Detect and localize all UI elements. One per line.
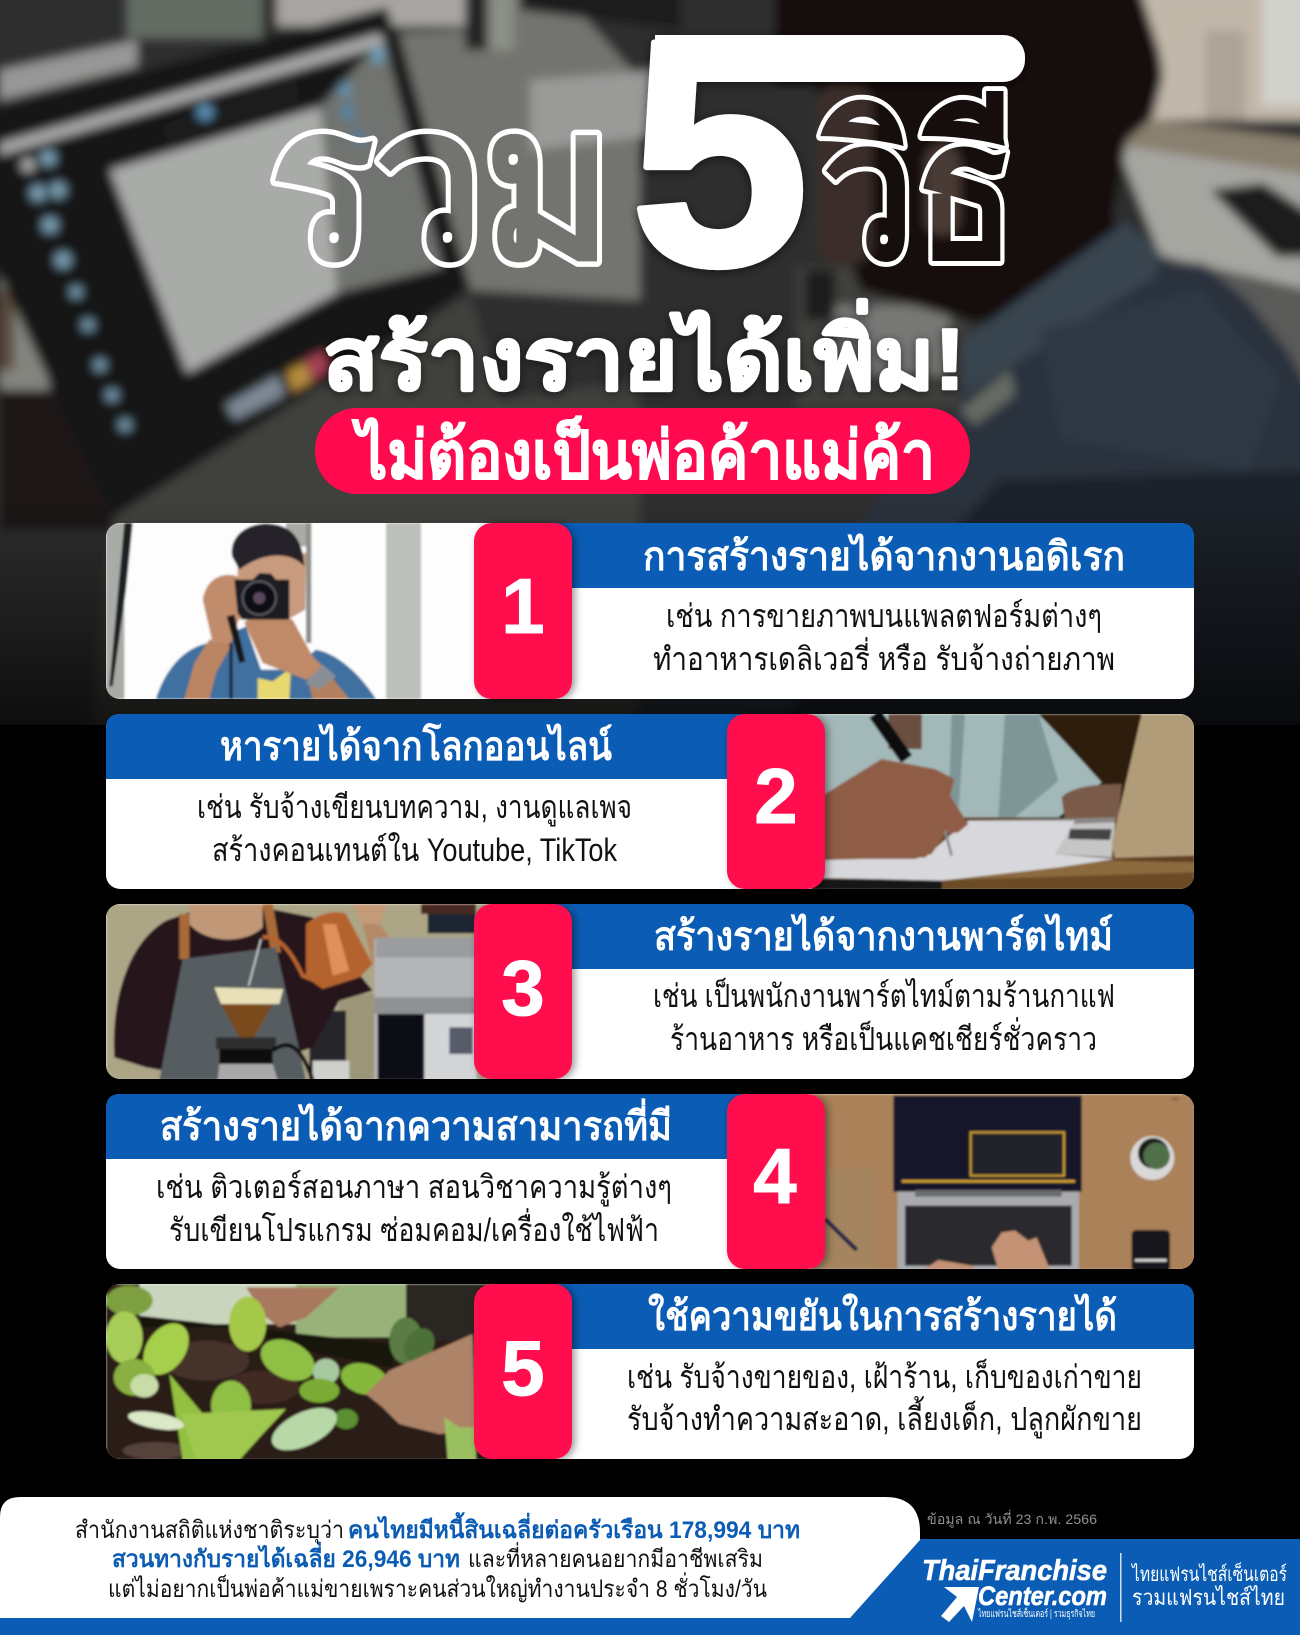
pink pill banner: ไม่ต้องเป็นพ่อค้าแม่ค้า xyxy=(352,415,935,492)
photo: barista pouring coffee xyxy=(106,904,506,1080)
description: สร้างคอนเทนต์ใน Youtube, TikTok xyxy=(212,832,618,868)
heading: สร้างรายได้จากความสามารถที่มี xyxy=(160,1098,672,1149)
footer statistics panel: แต่ไม่อยากเป็นพ่อค้าแม่ขายเพราะคนส่วนใหญ่ทำงานประจำ 8 ชั่วโมง/วัน xyxy=(108,1572,767,1603)
description: รับเขียนโปรแกรม ซ่อมคอม/เครื่องใช้ไฟฟ้า xyxy=(169,1208,659,1248)
heading: หารายได้จากโลกออนไลน์ xyxy=(220,723,612,769)
photo: writing by hand xyxy=(800,714,1195,890)
description: ร้านอาหาร หรือเป็นแคชเชียร์ชั่วคราว xyxy=(670,1017,1097,1057)
footer statistics panel: และที่หลายคนอยากมีอาชีพเสริม xyxy=(468,1542,763,1573)
subtitle: สร้างรายได้เพิ่ม! xyxy=(323,298,965,408)
description: เช่น เป็นพนักงานพาร์ตไทม์ตามร้านกาแฟ xyxy=(653,977,1115,1014)
number badge 4: 4 xyxy=(753,1132,797,1220)
description xyxy=(156,1169,672,1248)
title word: รวม: รวม xyxy=(269,63,613,304)
shirt xyxy=(860,260,1300,523)
description xyxy=(653,598,1115,677)
logo: ThaiFranchise Center: ThaiFranchise xyxy=(922,1555,1107,1587)
footer statistics panel: สำนักงานสถิติแห่งชาติระบุว่า xyxy=(75,1517,344,1545)
header bar xyxy=(540,904,1194,969)
description: เช่น รับจ้างขายของ, เฝ้าร้าน, เก็บของเก่าขาย xyxy=(627,1358,1142,1395)
header bar xyxy=(540,1284,1194,1349)
main title: รวม 5 วิธี xyxy=(270,35,1025,274)
monitor xyxy=(0,7,470,517)
description xyxy=(197,789,632,868)
heading: สร้างรายได้จากงานพาร์ตไทม์ xyxy=(654,913,1113,959)
number badge 2 xyxy=(727,714,825,889)
description: ทำอาหารเดลิเวอรี่ หรือ รับจ้างถ่ายภาพ xyxy=(653,637,1115,677)
right background xyxy=(1140,0,1300,120)
description: รับจ้างทำความสะอาด, เลี้ยงเด็ก, ปลูกผักขาย xyxy=(627,1396,1142,1439)
logo: ThaiFranchise Center: Center.com xyxy=(978,1581,1107,1611)
photo: laptop on wooden desk xyxy=(800,1094,1195,1272)
header bar xyxy=(106,1094,760,1159)
heading: การสร้างรายได้จากงานอดิเรก xyxy=(643,533,1125,579)
panel: item 1 xyxy=(106,523,1194,699)
panel: item 4 xyxy=(106,1094,1195,1272)
description: เช่น การขายภาพบนแพลตฟอร์มต่างๆ xyxy=(666,598,1102,634)
head xyxy=(775,0,1163,325)
description xyxy=(653,977,1115,1057)
hero photo: person working at a monitor xyxy=(0,0,1300,745)
header bar xyxy=(540,523,1194,588)
icon: logo arrow xyxy=(941,1587,979,1622)
heading: ใช้ความขยันในการสร้างรายได้ xyxy=(648,1293,1117,1339)
description: เช่น ติวเตอร์สอนภาษา สอนวิชาความรู้ต่างๆ xyxy=(156,1169,672,1207)
clutter under chin xyxy=(797,267,967,407)
photo: photographer xyxy=(106,523,422,699)
footer statistics panel: สวนทางกับรายได้เฉลี่ย 26,946 บาท xyxy=(112,1541,460,1573)
number badge 5 xyxy=(474,1284,572,1459)
number badge 4 xyxy=(727,1094,825,1269)
footer blue band xyxy=(0,1539,1300,1635)
footer statistics panel: คนไทยมีหนี้สินเฉลี่ยต่อครัวเรือน 178,994 บาท xyxy=(348,1511,800,1544)
number badge 2: 2 xyxy=(754,752,798,840)
logo tagline xyxy=(1130,1561,1287,1610)
number badge 1 xyxy=(474,523,572,699)
footer statistics panel xyxy=(0,1497,920,1618)
panel: item 5 xyxy=(106,1284,1194,1460)
panel: item 3 xyxy=(106,904,1194,1080)
title numeral 5 xyxy=(630,0,1025,333)
description: เช่น รับจ้างเขียนบทความ, งานดูแลเพจ xyxy=(197,789,632,827)
data date note: ข้อมูล ณ วันที่ 23 ก.พ. 2566 xyxy=(927,1510,1097,1528)
number badge 3: 3 xyxy=(501,944,545,1032)
panel: item 2 xyxy=(106,714,1195,890)
number badge 3 xyxy=(474,904,572,1079)
description xyxy=(627,1358,1142,1439)
header bar xyxy=(106,714,760,779)
logo tagline: รวมแฟรนไชส์ไทย xyxy=(1132,1585,1285,1610)
number badge 5: 5 xyxy=(501,1324,545,1412)
logo: ThaiFranchise Center xyxy=(922,1555,1107,1622)
photo: planting vegetables xyxy=(106,1284,506,1460)
logo: ThaiFranchise Center: ไทยแฟรนไชส์เซ็นเตอร์ | รวมธุรกิจไทย xyxy=(977,1606,1095,1620)
number badge 1: 1 xyxy=(501,562,545,650)
title word: วิธี: วิธี xyxy=(820,84,1016,300)
